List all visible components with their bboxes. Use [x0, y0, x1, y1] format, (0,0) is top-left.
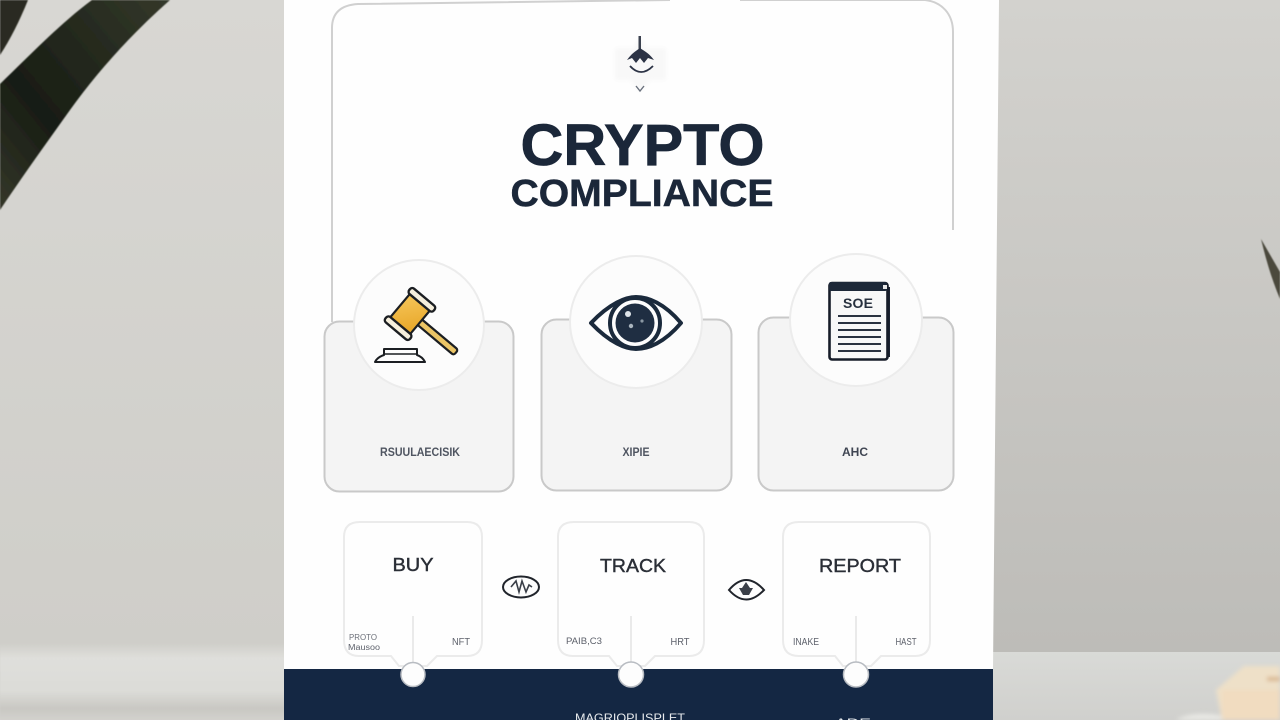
- title: CRYPTO: [520, 113, 764, 178]
- step card: report: HAST: [896, 637, 916, 648]
- panel: regulation: [324, 260, 514, 492]
- logo emblem: [615, 36, 666, 92]
- step card: report: REPORT: [819, 556, 901, 576]
- step card: track: [558, 522, 704, 687]
- top frame outline: [332, 0, 953, 322]
- icon: eye: [591, 297, 681, 349]
- step card: buy: BUY: [392, 555, 434, 575]
- icon: eye badge 2: [729, 580, 764, 600]
- step card: report: INAKE: [793, 637, 819, 648]
- footer band: [284, 669, 993, 720]
- background: left table surface: [0, 643, 290, 720]
- step card: buy: [344, 522, 482, 686]
- step card: track: HRT: [670, 637, 690, 648]
- icon: document: [829, 282, 890, 360]
- label: XIPIE: [622, 447, 650, 459]
- panel: aml document: [758, 254, 954, 490]
- plant leaves top left: [0, 0, 170, 210]
- icon: document: SOE: [843, 295, 873, 311]
- background: left wall: [0, 0, 290, 645]
- plant leaf right edge: [1261, 239, 1280, 299]
- step card: track: TRACK: [600, 556, 666, 576]
- poster sheet: [284, 0, 999, 720]
- icon: arrow badge 1: [503, 576, 539, 598]
- background: right wall: [990, 0, 1280, 652]
- step card: report: [783, 522, 930, 687]
- candle block bottom right: [1176, 666, 1280, 720]
- label: AHC: [842, 447, 868, 459]
- label: RSUULAECISIK: [380, 447, 461, 459]
- title: [510, 113, 774, 215]
- title: COMPLIANCE: [510, 173, 774, 215]
- icon: gavel: [375, 287, 470, 369]
- step card: buy: NFT: [452, 637, 470, 648]
- step card: track: PAIB,C3: [566, 636, 602, 647]
- step card: buy: PROTO: [349, 633, 377, 642]
- step card: buy: Mausoo: [348, 643, 381, 652]
- panel: kyc eye: [542, 256, 732, 490]
- background: right table surface: [990, 652, 1280, 720]
